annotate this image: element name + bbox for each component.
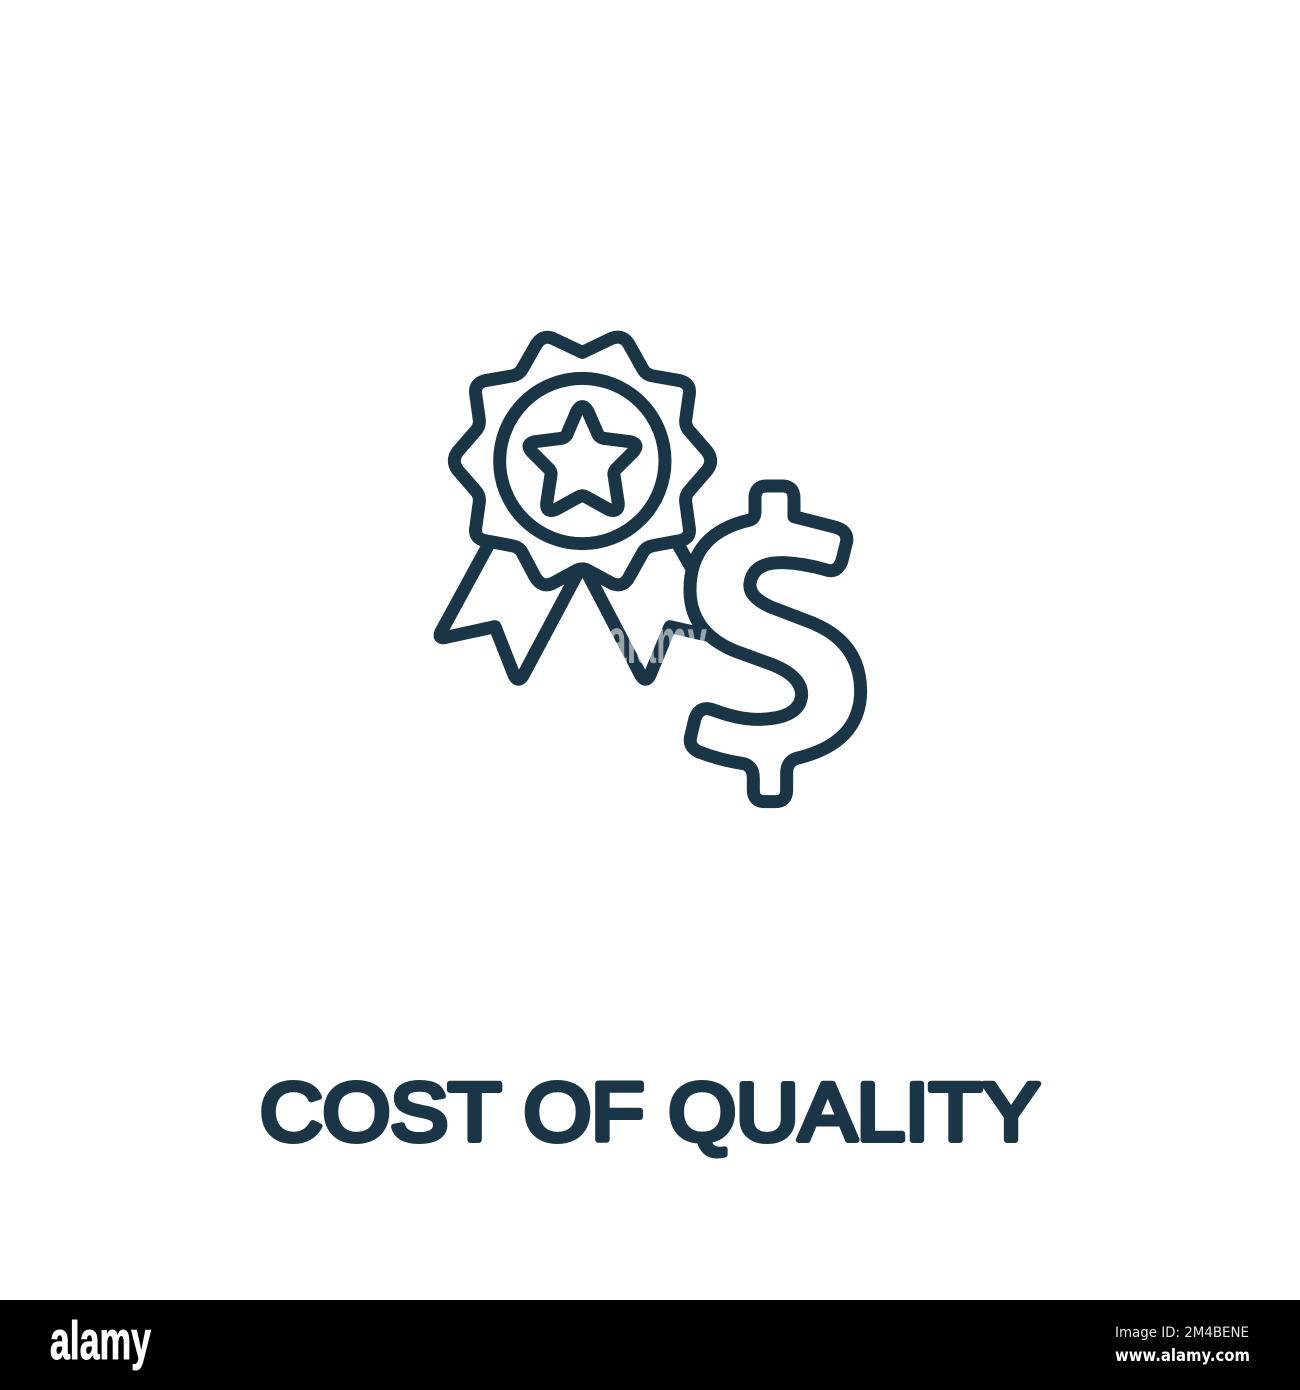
image id: Image ID: 2M4BENE [1115,1325,1249,1341]
icon: quality badge with dollar sign [440,337,861,802]
icon: inner circle [500,378,665,544]
watermark: alamy [607,605,707,677]
icon: left ribbon tail [440,545,577,679]
icon: star [529,407,636,510]
icon: right ribbon tail [588,545,707,679]
title: COST OF QUALITY [260,1067,1040,1158]
footer band [0,1300,1300,1390]
website url: www.alamy.com [1115,1346,1250,1366]
icon: dollar sign [690,486,861,802]
icon: rosette badge outline [454,337,711,585]
logo: alamy: alamy [50,1311,151,1371]
